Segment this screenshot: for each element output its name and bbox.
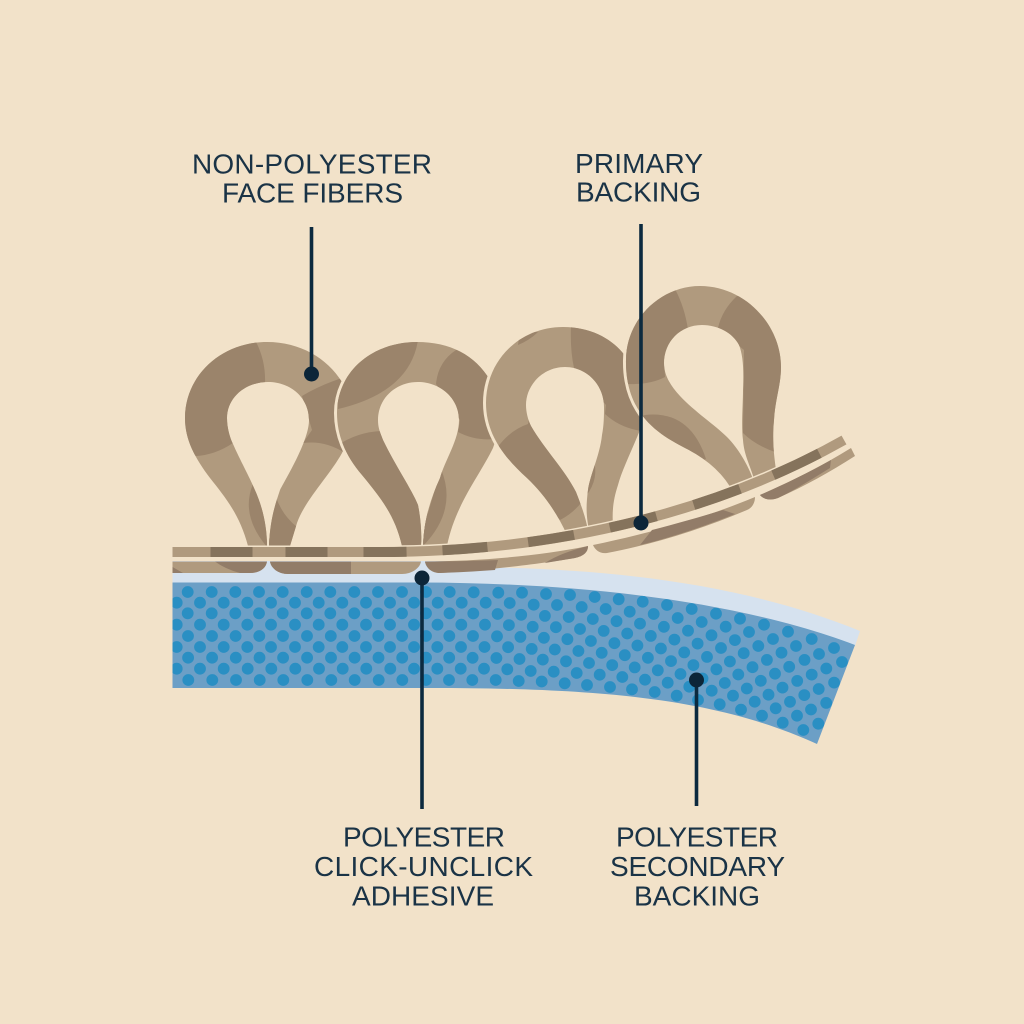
lower strip darker patches [172, 460, 831, 574]
label: primary backing: PRIMARY [575, 148, 703, 179]
leader: face fibers [304, 227, 319, 382]
primary backing lower strip with rounded lobes [172, 448, 855, 574]
leader: secondary backing [689, 672, 704, 806]
label: primary backing: BACKING [576, 176, 701, 208]
fiber loop 3 [483, 327, 640, 530]
polyester adhesive layer [172, 561, 860, 646]
label: non-polyester face fibers [192, 148, 432, 208]
label: polyester secondary backing: BACKING [634, 880, 760, 911]
label: polyester click-unclick adhesive: CLICK-UNCLICK [314, 851, 533, 882]
leader: primary backing [634, 224, 648, 530]
label: non-polyester face fibers: NON-POLYESTER [192, 148, 432, 179]
panel: carpet cross-section diagram [170, 224, 860, 809]
fiber loop 1 [185, 342, 343, 546]
label: primary backing [575, 148, 703, 208]
label: polyester click-unclick adhesive: POLYESTER [343, 822, 505, 853]
fiber loop 2 [330, 340, 500, 550]
label: polyester click-unclick adhesive [314, 822, 533, 911]
label: polyester secondary backing: POLYESTER [616, 822, 778, 853]
fiber loop 4 [623, 286, 781, 486]
label: polyester click-unclick adhesive: ADHESIVE [352, 880, 494, 911]
primary backing upper strip [172, 440, 844, 552]
secondary backing dots [177, 592, 842, 730]
label: non-polyester face fibers: FACE FIBERS [222, 177, 403, 208]
label: polyester secondary backing [610, 822, 785, 911]
polyester secondary backing band [172, 582, 855, 744]
leader: adhesive [414, 570, 430, 809]
label: polyester secondary backing: SECONDARY [610, 851, 785, 882]
